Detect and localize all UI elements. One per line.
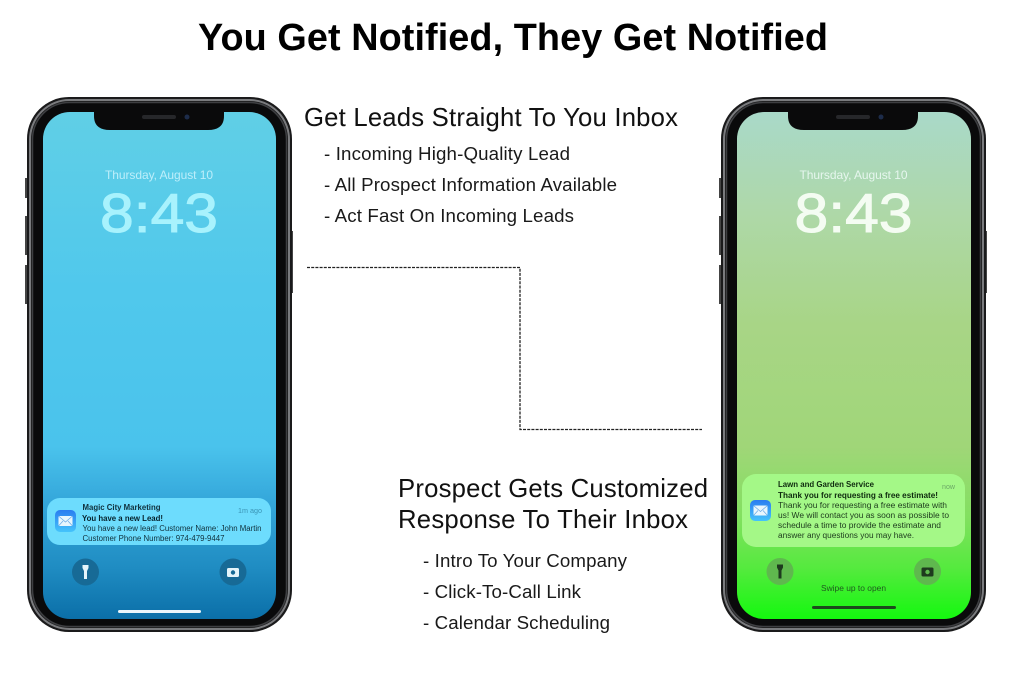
notification right: answer any questions you may have. <box>778 531 914 540</box>
list: lead benefits <box>324 143 617 226</box>
notification left: Magic City Marketing <box>82 503 161 512</box>
time left: 8:43 <box>100 182 218 244</box>
list: prospect benefits: - Intro To Your Company <box>423 550 628 571</box>
home bar right <box>812 606 896 609</box>
notification right: Lawn and Garden Service <box>778 480 875 489</box>
time right: 8:43 <box>794 182 912 244</box>
date left: Thursday, August 10 <box>105 168 213 182</box>
notification right: schedule a time to provide the estimate and <box>778 521 941 530</box>
notification left: You have a new Lead! <box>82 514 163 523</box>
notification right: Thank you for requesting a free estimate with <box>778 501 947 510</box>
notification left: You have a new lead! Customer Name: John Martin <box>82 524 262 533</box>
phone: left, agent lock screen <box>25 97 293 632</box>
icon: mail right <box>750 500 771 521</box>
title: You Get Notified, They Get Notified <box>198 17 828 59</box>
heading: get leads: Get Leads Straight To You Inbox <box>304 104 678 132</box>
notch right <box>788 110 918 130</box>
date right: Thursday, August 10 <box>800 168 908 182</box>
icon: mail left <box>55 510 76 532</box>
swipe text: Swipe up to open <box>821 584 886 593</box>
notification right: now <box>942 482 956 491</box>
notification right <box>742 474 965 547</box>
list: lead benefits: - All Prospect Information Available <box>324 174 617 195</box>
heading: prospect response: Response To Their Inbox <box>398 506 688 534</box>
connector: dashed line between phones <box>307 268 702 430</box>
home bar left <box>118 610 201 613</box>
notification right: us! We will contact you as soon as possible to <box>778 511 950 520</box>
heading: prospect response <box>398 475 708 534</box>
notification right: Thank you for requesting a free estimate! <box>778 491 938 500</box>
screen left <box>43 112 276 619</box>
phone body left <box>25 97 293 632</box>
phone: right, prospect lock screen <box>719 97 987 632</box>
notification left: Customer Phone Number: 974-479-9447 <box>82 534 225 543</box>
icon: camera right <box>914 558 941 585</box>
notch left <box>94 110 224 130</box>
list: lead benefits: - Incoming High-Quality Lead <box>324 143 570 164</box>
screen right <box>737 112 971 619</box>
list: prospect benefits <box>423 550 628 633</box>
list: lead benefits: - Act Fast On Incoming Leads <box>324 205 574 226</box>
icon: flashlight left <box>72 558 99 586</box>
notification left: 1m ago <box>238 506 262 515</box>
phone body right <box>719 97 987 632</box>
list: prospect benefits: - Click-To-Call Link <box>423 581 582 602</box>
icon: camera left <box>220 558 246 586</box>
heading: prospect response: Prospect Gets Customized <box>398 475 708 503</box>
list: prospect benefits: - Calendar Scheduling <box>423 612 610 633</box>
icon: flashlight right <box>766 558 794 585</box>
notification left <box>47 498 271 545</box>
